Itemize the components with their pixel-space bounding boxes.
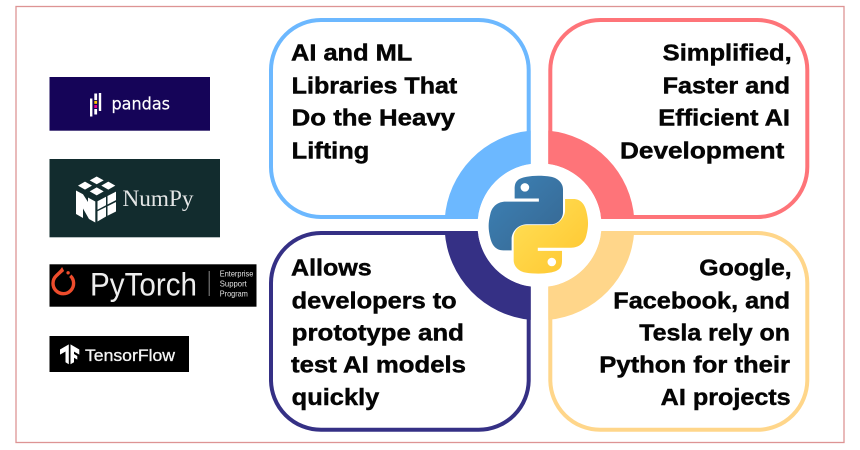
text: prototyping: test AI models [291, 351, 466, 377]
panel: simplified development [548, 20, 807, 219]
text: companies: Google, [699, 255, 792, 281]
logo: PyTorch [50, 264, 256, 307]
text: simplified: Development [620, 137, 785, 163]
text: libraries: Do the Heavy [292, 105, 455, 131]
text: libraries: Lifting [292, 137, 369, 163]
logo: pandas [50, 77, 210, 131]
panel: AI and ML libraries [271, 20, 531, 219]
text: libraries [291, 40, 458, 163]
text: simplified: Efficient AI [658, 105, 790, 131]
center white disc [478, 163, 602, 287]
text: companies: Python for their [599, 351, 790, 377]
arc: red quadrant [548, 131, 634, 219]
text: simplified: Faster and [663, 72, 790, 98]
text: companies: Tesla rely on [639, 320, 790, 346]
panel: rapid prototyping [271, 231, 531, 430]
text: prototyping: Allows [291, 255, 372, 281]
logo: PyTorch: PyTorch [90, 267, 197, 303]
logo: TensorFlow [50, 336, 189, 372]
text: companies [599, 255, 792, 410]
text: simplified [620, 40, 792, 163]
logo: PyTorch: Program [220, 289, 248, 299]
text: libraries: Libraries That [292, 72, 458, 98]
text: simplified: Simplified, [663, 40, 792, 66]
text: companies: Facebook, and [613, 287, 790, 313]
text: prototyping [291, 255, 466, 410]
arc: blue quadrant [445, 131, 531, 219]
arc: navy quadrant [445, 231, 531, 320]
logo: TensorFlow: TensorFlow [85, 347, 175, 365]
icon: Python logo [489, 176, 588, 274]
logo: NumPy: NumPy [122, 186, 194, 212]
logo: PyTorch: Enterprise [220, 269, 254, 279]
text: prototyping: prototype and [292, 320, 464, 346]
panel: companies using Python [548, 231, 807, 430]
arc: yellow quadrant [548, 231, 634, 320]
logo: NumPy [50, 159, 220, 237]
text: companies: AI projects [661, 384, 791, 410]
text: prototyping: quickly [292, 384, 380, 410]
text: libraries: AI and ML [291, 40, 412, 66]
logo: pandas: pandas [112, 94, 170, 114]
text: prototyping: developers to [292, 287, 457, 313]
logo: PyTorch: Support [220, 279, 247, 289]
